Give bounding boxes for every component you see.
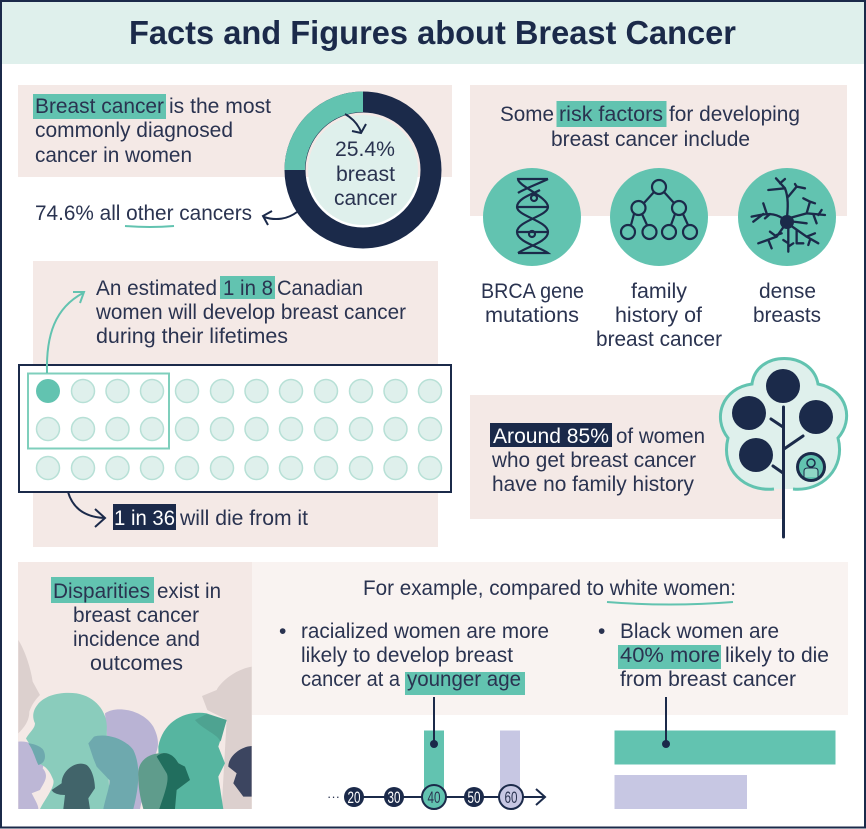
panel: 1 in 8: An estimated <box>96 277 217 300</box>
label: dense breasts: dense <box>759 280 816 303</box>
label: family history: family <box>631 280 688 303</box>
dot grid <box>19 365 451 492</box>
label: family history: breast cancer <box>596 328 722 351</box>
panel: 1 in 8: Canadian <box>277 277 363 300</box>
text: Black women: 40% more <box>620 644 720 667</box>
panel: family history 85%: have no family history <box>492 473 694 496</box>
header banner <box>2 2 864 64</box>
heading: disparities <box>51 577 221 675</box>
text: 1 in 36 <box>113 504 308 530</box>
panel: risk factors: risk factors <box>559 103 663 126</box>
label: family history: history of <box>615 304 702 327</box>
chart: age timeline: 60 <box>504 788 518 807</box>
chart: age timeline: 20 <box>348 788 360 807</box>
illustration: silhouettes <box>18 640 252 809</box>
label: dense breasts: breasts <box>753 304 821 327</box>
donut chart: breast <box>336 163 395 186</box>
title: Facts and Figures about Breast Cancer <box>129 14 736 51</box>
panel: most commonly diagnosed: is the most <box>169 95 271 118</box>
highlight: breast cancer <box>33 94 166 119</box>
text: 1 in 36: will die from it <box>179 507 308 530</box>
panel: most commonly diagnosed: commonly diagnosed <box>35 119 233 142</box>
text: racialized women: • <box>279 620 286 643</box>
arrow: navy to 1 in 36 <box>68 492 105 527</box>
panel: disparities <box>18 562 252 809</box>
text: 1 in 36: 1 in 36 <box>114 507 175 530</box>
panel: 1 in 8: during their lifetimes <box>96 325 288 348</box>
panel: 1 in 8 <box>33 261 438 547</box>
chart: mortality bars <box>614 697 836 809</box>
panel: family history 85%: of women <box>616 425 705 448</box>
chart: age timeline: 50 <box>468 788 480 807</box>
panel: most commonly diagnosed: Breast cancer <box>35 95 164 118</box>
panel: 1 in 8: 1 in 8 <box>223 277 273 300</box>
panel: most commonly diagnosed: cancer in women <box>35 144 192 167</box>
panel: risk factors: breast cancer include <box>551 128 750 151</box>
text: Black women: • <box>598 620 605 643</box>
text: racialized women: younger age <box>407 668 521 691</box>
panel: 1 in 8: women will develop breast cancer <box>95 301 406 324</box>
icon: dense breast tissue <box>738 168 836 266</box>
text: Black women <box>598 620 829 691</box>
heading: disparities: exist in <box>157 580 221 603</box>
panel: family history 85% <box>470 395 784 519</box>
label: BRCA: mutations <box>485 304 579 327</box>
chart: age timeline <box>327 697 545 809</box>
icon: family tree <box>610 168 708 266</box>
donut chart <box>284 92 431 238</box>
panel: examples <box>252 562 848 715</box>
text: Black women: from breast cancer <box>620 668 796 691</box>
text: Black women: Black women are <box>620 620 779 643</box>
text: racialized women: racialized women are more <box>301 620 549 643</box>
heading: disparities: breast cancer <box>73 604 199 627</box>
panel: risk factors: for developing <box>669 103 800 126</box>
panel: risk factors: Some <box>500 103 554 126</box>
panel: most commonly diagnosed <box>18 85 452 177</box>
label: BRCA: BRCA gene <box>481 280 584 303</box>
panel: risk factors <box>470 85 847 216</box>
text: other cancers: 74.6% all other cancers <box>35 202 252 225</box>
label: dense breasts <box>753 280 821 327</box>
chart: age timeline: 30 <box>388 788 400 807</box>
panel: family history 85%: Around 85% <box>493 425 609 448</box>
label: family history <box>596 280 722 351</box>
icon: DNA <box>483 168 581 266</box>
label: BRCA <box>481 280 584 327</box>
panel: examples: For example, compared to white women: <box>363 577 736 600</box>
heading: disparities: Disparities <box>53 580 150 603</box>
text: Black women: likely to die <box>725 644 829 667</box>
heading: disparities: outcomes <box>90 652 183 675</box>
chart: age timeline: 40 <box>428 788 440 807</box>
text: racialized women: cancer at a <box>301 668 400 691</box>
donut chart: cancer <box>334 187 397 210</box>
arrow: teal to 1 in 8 <box>47 292 84 373</box>
donut chart: 25.4% <box>335 138 395 161</box>
chart: age timeline: ··· <box>327 789 340 804</box>
panel: family history 85%: who get breast cancer <box>491 449 696 472</box>
heading: disparities: incidence and <box>73 628 200 651</box>
text: racialized women <box>279 620 549 695</box>
icon: tree <box>720 358 847 537</box>
text: racialized women: likely to develop breast <box>301 644 513 667</box>
